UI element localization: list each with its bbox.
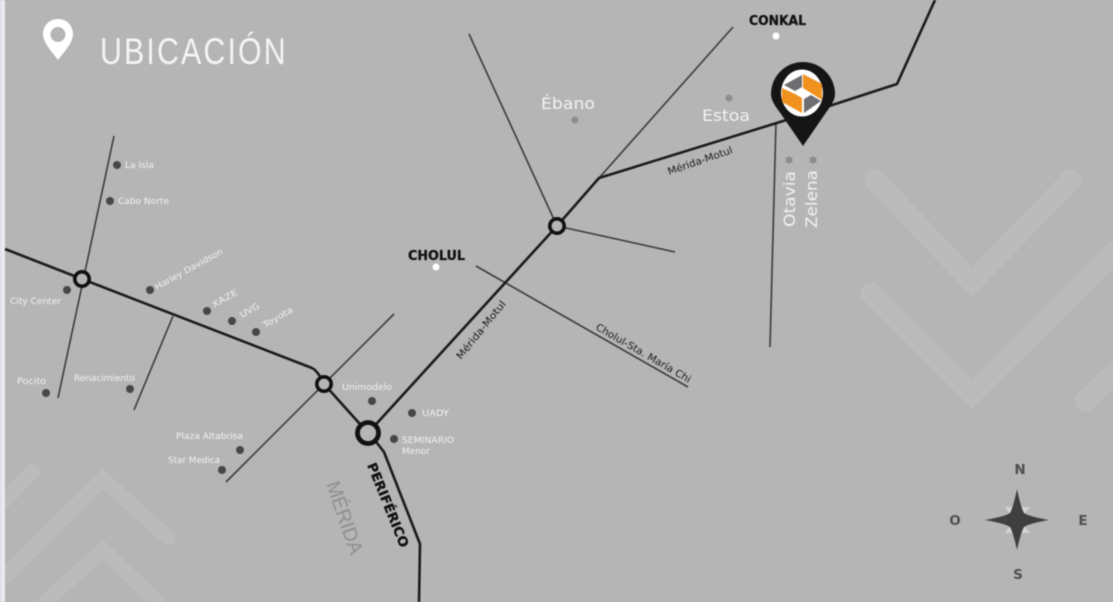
label: Cholul-Sta. María Chi: Cholul-Sta. María Chi (594, 321, 693, 386)
compass letters: N (1014, 462, 1026, 478)
place names (321, 14, 821, 558)
landmark dots (42, 161, 416, 474)
landmark labels: Plaza Altabrisa (176, 432, 243, 442)
heading: UBICACIÓN (100, 31, 288, 72)
landmark labels: Menor (402, 447, 431, 457)
landmark labels: Cabo Norte (118, 197, 169, 207)
landmark labels: Toyota (260, 305, 295, 331)
secondary roads (58, 27, 776, 482)
label: Estoa: Estoa (702, 106, 750, 125)
label: Mérida: MÉRIDA (321, 478, 368, 558)
landmark labels: Harley Davidson (154, 247, 225, 293)
map marker with logo (771, 62, 835, 146)
landmark labels: Star Medica (168, 456, 220, 466)
label: Mérida-Motul south: Mérida-Motul (454, 298, 509, 362)
compass letters: E (1078, 513, 1088, 529)
landmark labels: City Center (10, 297, 62, 307)
icon: location pin (43, 19, 73, 60)
compass star (985, 489, 1049, 550)
landmark labels: Renacimiento (74, 374, 135, 384)
road junctions (75, 219, 564, 444)
label: Ébano: Ébano (541, 94, 595, 113)
label: Zelena: Zelena (802, 170, 821, 228)
landmark labels (10, 161, 454, 466)
label: Otavia: Otavia (780, 171, 799, 227)
label: Mérida-Motul north: Mérida-Motul (666, 144, 734, 178)
landmark labels: UADY (422, 409, 450, 419)
compass letters: S (1013, 567, 1023, 583)
landmark labels: UVG (238, 301, 262, 321)
compass letters: O (949, 513, 961, 529)
landmark labels: Pocito (17, 377, 46, 387)
compass letters (949, 462, 1088, 583)
title: Ubicación (43, 19, 288, 72)
road labels (363, 144, 734, 550)
label: Periférico: PERIFÉRICO (363, 461, 412, 550)
landmark labels: La Isla (125, 161, 154, 171)
compass (949, 462, 1088, 583)
label: Conkal: CONKAL (749, 14, 806, 29)
label: Cholul: CHOLUL (408, 249, 465, 264)
landmark labels: XAZE (210, 288, 240, 311)
landmark labels: Unimodelo (342, 383, 392, 393)
landmark labels: SEMINARIO (402, 436, 454, 446)
